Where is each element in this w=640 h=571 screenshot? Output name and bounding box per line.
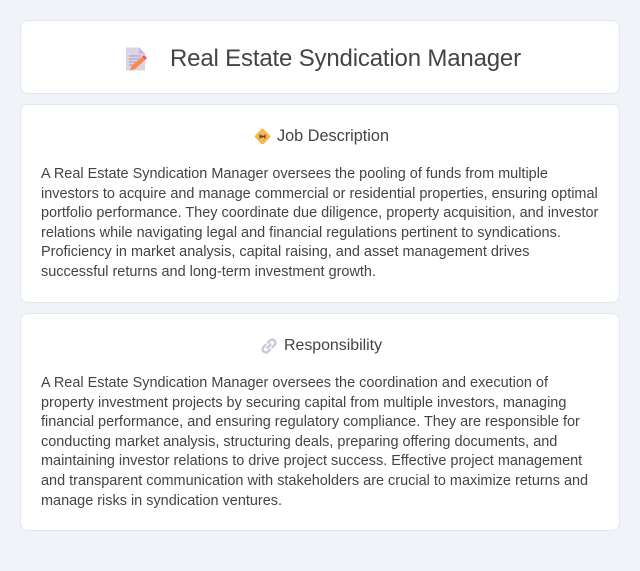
text: job description body: A Real Estate Syndication Manager oversees the pooling of funds from multiple bbox=[41, 166, 548, 182]
heading: job description: Job Description bbox=[277, 127, 389, 145]
icon: chain link bbox=[261, 338, 277, 354]
text: responsibility body: conducting market analysis, structuring deals, preparing offering documents, and bbox=[41, 434, 557, 450]
text: job description body: investors to acquire and manage commercial or residential properties, ensuring optimal bbox=[41, 186, 598, 202]
text: responsibility body: and transparent communication with stakeholders are crucial to maximize returns and bbox=[41, 473, 588, 489]
text: job description body: portfolio performance. They coordinate due diligence, property acquisition, and investor bbox=[41, 205, 598, 221]
text: job description body bbox=[41, 166, 598, 280]
text: responsibility body: maintaining investor relations to drive project success. Effective project management bbox=[41, 453, 582, 469]
heading: responsibility: Responsibility bbox=[284, 337, 382, 354]
panel: job description bbox=[20, 104, 620, 303]
text: job description body: Proficiency in market analysis, capital raising, and asset management drives bbox=[41, 244, 529, 260]
text: responsibility body bbox=[41, 375, 588, 509]
text: job description body: relations while navigating legal and financial regulations pertinent to syndications. bbox=[41, 225, 561, 241]
icon: orange diamond sign bbox=[254, 128, 270, 144]
text: responsibility body: property investment projects by securing capital from multiple investors, managing bbox=[41, 395, 566, 411]
text: job description body: successful returns and long-term investment growth. bbox=[41, 264, 376, 280]
text: responsibility body: financial performance, and ensuring regulatory compliance. They are responsible for bbox=[41, 414, 580, 430]
panel: title card bbox=[20, 20, 620, 94]
title: Real Estate Syndication Manager bbox=[170, 45, 521, 72]
panel: responsibility bbox=[20, 313, 620, 531]
icon: document with pencil bbox=[126, 48, 147, 70]
text: responsibility body: A Real Estate Syndication Manager oversees the coordination and execution of bbox=[41, 375, 548, 391]
text: responsibility body: manage risks in syndication ventures. bbox=[41, 493, 282, 509]
